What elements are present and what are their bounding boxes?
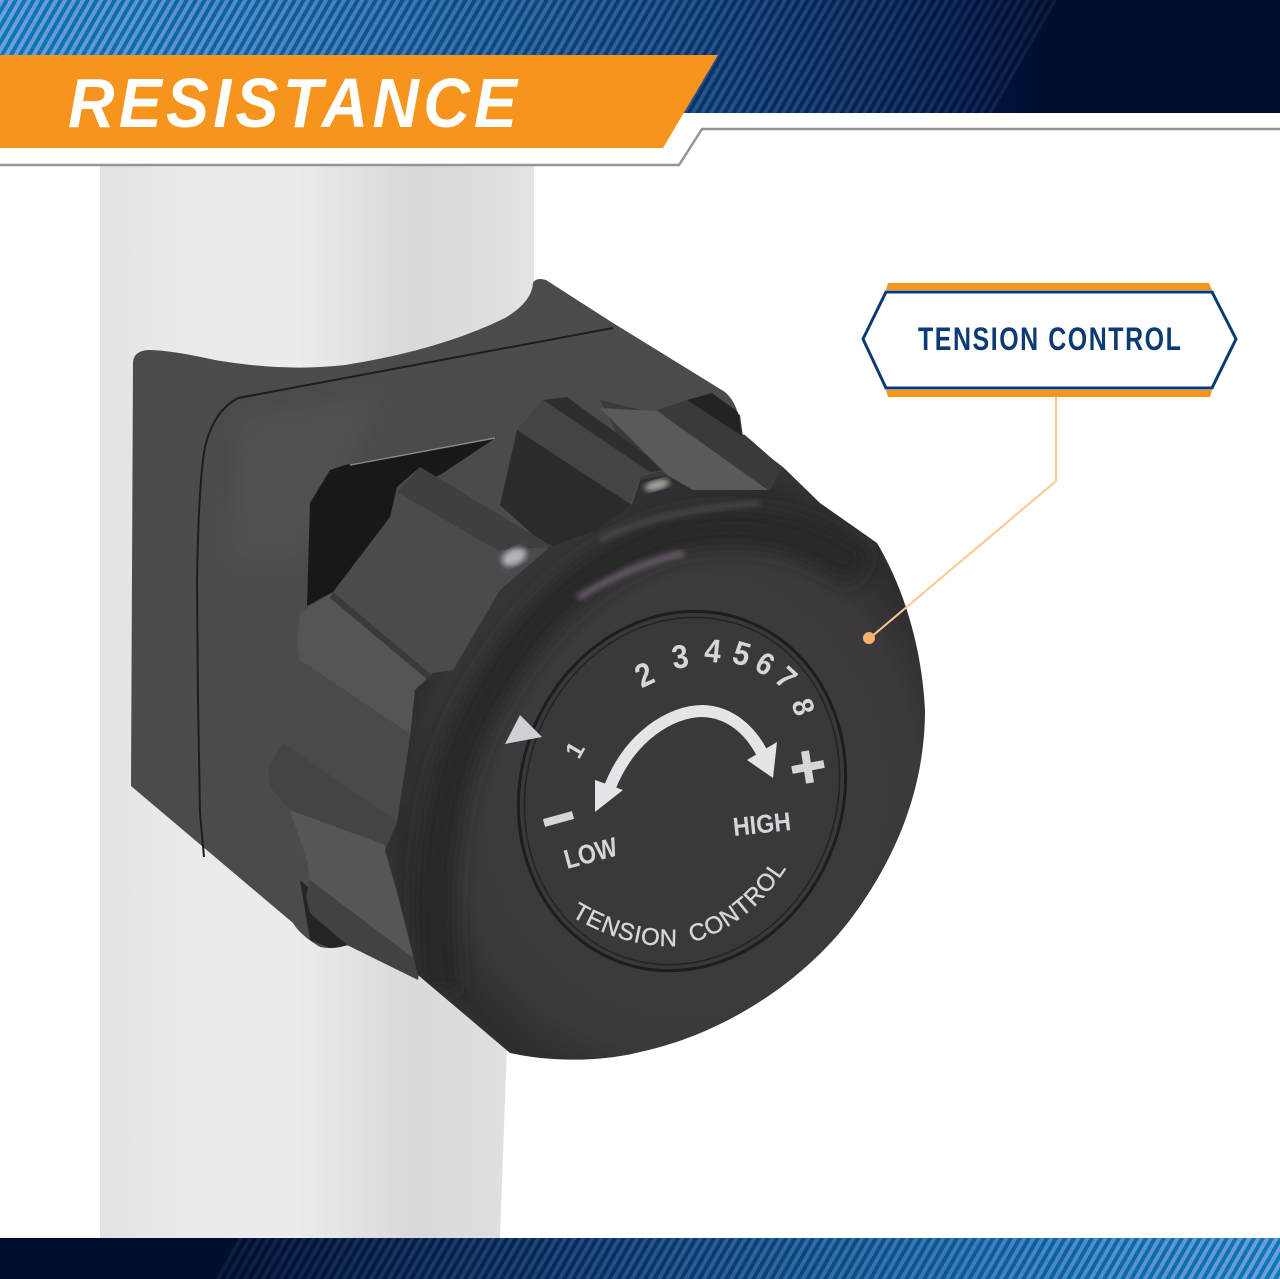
callout: tension control (863, 283, 1236, 397)
knob ribs (268, 393, 785, 980)
dial numbers: 5 (729, 634, 755, 674)
orange title banner (0, 55, 718, 148)
cavity edge highlight (350, 438, 495, 465)
tension control knob assembly (131, 279, 925, 1060)
leader dot (863, 632, 875, 644)
direction arrow (595, 711, 777, 812)
plus sign (792, 751, 824, 783)
pole (100, 165, 534, 1238)
top banner background (0, 0, 1280, 113)
dial numbers: 7 (768, 660, 803, 696)
title: RESISTANCE (68, 65, 519, 143)
dial numbers (561, 632, 820, 763)
dome collar shading (436, 528, 860, 990)
banner outline line (0, 129, 1280, 165)
high label: HIGH (731, 806, 792, 842)
knob cavity (307, 437, 497, 606)
dial numbers: 4 (703, 632, 724, 670)
dial face (505, 610, 847, 972)
indicator triangle (505, 715, 542, 744)
bottom banner background (0, 1238, 1280, 1279)
dial numbers: 6 (749, 645, 780, 683)
bracket seam (197, 328, 613, 580)
shaft shadow (300, 880, 350, 948)
knob dome (385, 467, 925, 1060)
callout: tension control: TENSION CONTROL (918, 322, 1181, 358)
dial numbers: 8 (784, 695, 820, 720)
minus sign (544, 815, 573, 823)
dial numbers: 1 (561, 737, 591, 763)
low label: LOW (561, 832, 621, 875)
leader line (870, 397, 1056, 638)
dial numbers: 3 (669, 638, 691, 676)
dial caption: TENSION CONTROL (576, 866, 786, 946)
dial numbers: 2 (629, 655, 660, 695)
mounting bracket (131, 279, 740, 948)
dome highlights (499, 477, 760, 598)
